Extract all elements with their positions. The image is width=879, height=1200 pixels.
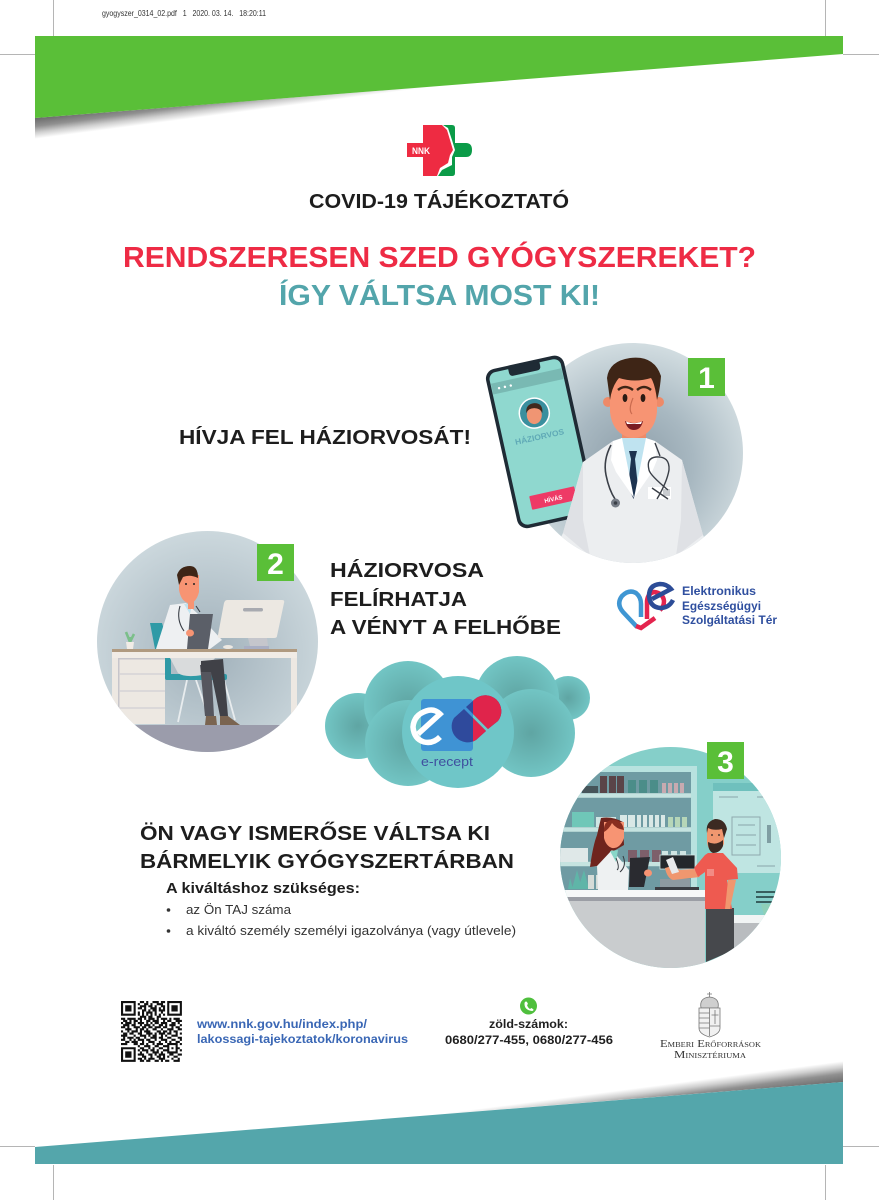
cloud with e-recept logo [325, 656, 590, 788]
customer [665, 819, 738, 962]
icon: phone [484, 354, 597, 530]
requirements list: az Ön TAJ száma [186, 902, 292, 917]
step 2 text: HÁZIORVOSA [330, 559, 484, 582]
desk [112, 649, 297, 725]
badge: 1: 1 [698, 362, 715, 395]
ministry logo [660, 992, 761, 1061]
doctor seated [156, 566, 240, 725]
main heading [123, 240, 756, 312]
badge: 3: 3 [717, 746, 734, 779]
NNK logo: NNK [412, 146, 430, 156]
step 3 text [140, 822, 514, 897]
floor [135, 725, 280, 752]
step 2 text [330, 559, 561, 639]
icon: coat of arms [699, 992, 720, 1037]
chair [150, 623, 235, 724]
icon: e-recept: e-recept [421, 755, 474, 769]
badge: 1 [688, 358, 725, 396]
right wall panel [713, 783, 783, 915]
badge: 3 [707, 742, 744, 779]
step 1 illustration: doctor with phone [484, 343, 743, 570]
website link [196, 1017, 408, 1046]
ministry logo: Minisztériuma [674, 1050, 746, 1061]
step 2 illustration: doctor at desk [90, 531, 330, 755]
step 3 text: BÁRMELYIK GYÓGYSZERTÁRBAN [140, 849, 514, 873]
icon: phone [520, 998, 537, 1014]
EESZT logo: Elektronikus [682, 586, 756, 598]
EESZT logo: Szolgáltatási Tér [682, 615, 778, 627]
step 2 text: FELÍRHATJA [330, 588, 467, 611]
icon: phone: HÍVÁS [544, 493, 563, 505]
step 3 illustration: pharmacy [550, 742, 783, 971]
register [655, 855, 699, 891]
icon: e-recept [413, 695, 501, 769]
badge: 2 [257, 544, 294, 581]
green phone numbers [445, 1017, 613, 1047]
step 2 text: A VÉNYT A FELHŐBE [330, 616, 561, 639]
main heading: RENDSZERESEN SZED GYÓGYSZEREKET? [123, 240, 756, 274]
monitor [218, 600, 284, 649]
bottom teal banner [35, 1061, 843, 1164]
shelves [550, 766, 697, 892]
top green banner [35, 36, 843, 139]
step 1 text: HÍVJA FEL HÁZIORVOSÁT! [179, 426, 471, 449]
icon: hearts [619, 584, 673, 628]
pharmacist [590, 818, 652, 890]
print slug: gyogyszer_0314_02.pdf 1 2020. 03. 14. 18:20:11 [102, 9, 266, 18]
ministry logo: Emberi Erőforrások [660, 1039, 761, 1050]
website link: lakossagi-tajekoztatok/koronavirus [197, 1032, 408, 1046]
plant [126, 632, 134, 649]
requirements list [167, 902, 516, 938]
EESZT logo: Egészségügyi [682, 601, 761, 613]
green phone numbers: 0680/277-455, 0680/277-456 [445, 1033, 613, 1047]
green phone numbers: zöld-számok: [489, 1017, 568, 1031]
EESZT logo [619, 584, 778, 628]
step 3 text: A kiváltáshoz szükséges: [166, 881, 360, 897]
subtitle: COVID-19 TÁJÉKOZTATÓ [309, 189, 569, 213]
website link: www.nnk.gov.hu/index.php/ [196, 1017, 368, 1031]
badge: 2: 2 [267, 548, 284, 581]
requirements list: a kiváltó személy személyi igazolványa (vagy útlevele) [186, 923, 516, 938]
doctor figure [562, 358, 704, 563]
QR code [121, 1002, 182, 1061]
main heading: ÍGY VÁLTSA MOST KI! [279, 278, 600, 312]
counter [565, 890, 765, 968]
icon: phone: HÁZIORVOS [514, 427, 566, 447]
step 3 text: ÖN VAGY ISMERŐSE VÁLTSA KI [140, 822, 490, 845]
NNK logo [407, 125, 472, 176]
